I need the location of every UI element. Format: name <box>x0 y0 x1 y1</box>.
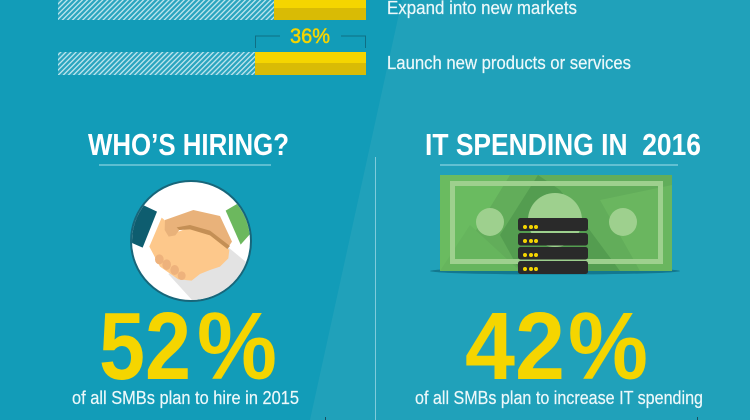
stat: 52 percent <box>99 293 277 400</box>
bar: launch new products or services <box>58 52 366 75</box>
stat: 52 percent: % <box>197 293 277 400</box>
heading: IT spending in 2016: IT SPENDING IN 2016 <box>425 127 701 162</box>
stat: 42 percent <box>465 293 648 400</box>
bar: expand into new markets <box>58 0 366 20</box>
caption: plan to hire: of all SMBs plan to hire in 2015 <box>72 388 299 408</box>
icon: dollar bill with server stack <box>430 175 680 274</box>
icon: handshake in circle <box>127 181 257 303</box>
stat: 52 percent: 52 <box>99 293 191 400</box>
value: 36 percent with bracket <box>256 25 366 48</box>
stat: 42 percent: 42 <box>465 293 565 400</box>
caption: plan to increase IT spending: of all SMBs plan to increase IT spending <box>415 388 703 408</box>
stat: 42 percent: % <box>568 293 648 400</box>
heading: who's hiring: WHO’S HIRING? <box>88 127 289 162</box>
value: 36 percent with bracket: 36% <box>290 25 330 48</box>
label: launch new products or services: Launch new products or services <box>387 53 631 73</box>
server stack <box>518 218 588 274</box>
